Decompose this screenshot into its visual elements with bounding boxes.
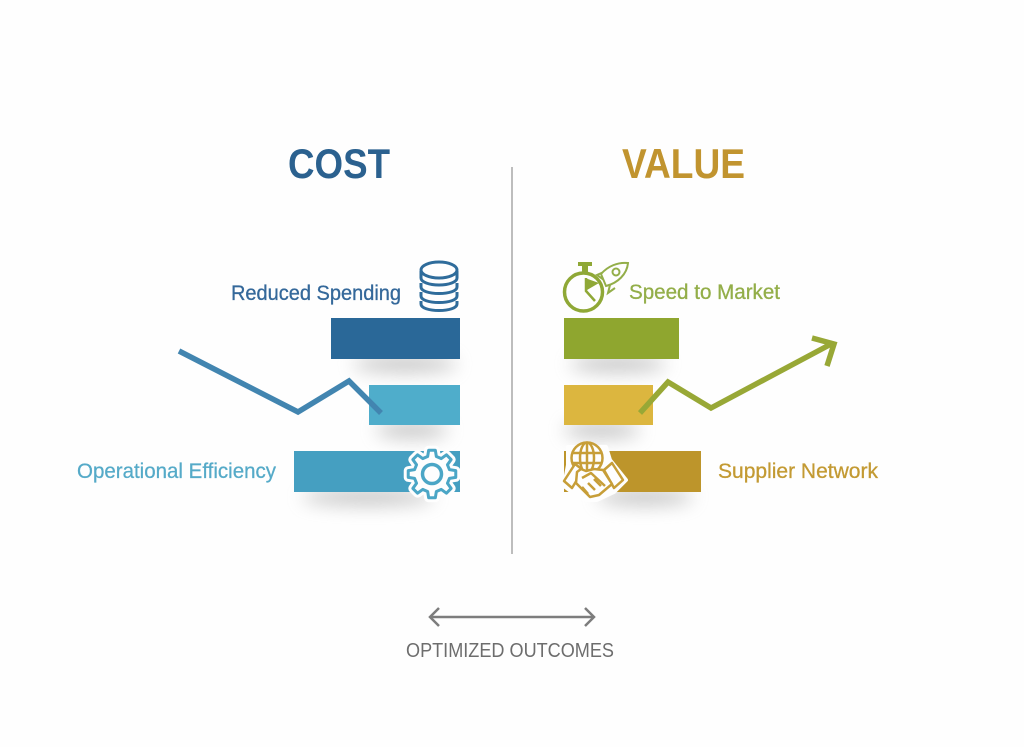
bar: speed to market: [564, 318, 679, 359]
label: Operational Efficiency: Operational Efficiency: [77, 460, 276, 483]
trend line: falling cost: [179, 351, 381, 413]
title: COST: COST: [288, 140, 390, 187]
bar: middle value: [564, 385, 653, 425]
caption: optimized outcomes: OPTIMIZED OUTCOMES: [406, 639, 614, 662]
shadow: bar 1: [570, 356, 666, 372]
label: Speed to Market: Speed to Market: [629, 281, 780, 304]
double arrow: [430, 608, 594, 626]
shadow: bar 3: [597, 489, 693, 505]
trend arrow: rising value: [640, 338, 834, 413]
icon: globe and handshake: [564, 442, 626, 500]
shadow: bar 3: [302, 489, 434, 505]
infographic: cost versus value: [78, 149, 878, 657]
icon: coin stack: [421, 262, 457, 310]
shadow: bar 1: [353, 356, 457, 372]
icon: rocket: [597, 263, 628, 293]
shadow: bar 2: [564, 422, 640, 438]
title: VALUE: VALUE: [622, 140, 745, 187]
bar: operational efficiency: [294, 451, 460, 492]
bar: reduced spending: [331, 318, 460, 359]
icon: stopwatch: [564, 262, 602, 311]
center divider: [511, 167, 513, 554]
shadow: bar 2: [376, 422, 448, 438]
bar: middle cost: [369, 385, 460, 425]
label: Reduced Spending: Reduced Spending: [231, 282, 401, 305]
label: Supplier Network: Supplier Network: [718, 460, 878, 483]
icon: gear: [408, 450, 456, 498]
panel: cost bars: [77, 262, 460, 505]
panel: value bars: [564, 262, 878, 505]
bar: supplier network: [564, 451, 701, 492]
